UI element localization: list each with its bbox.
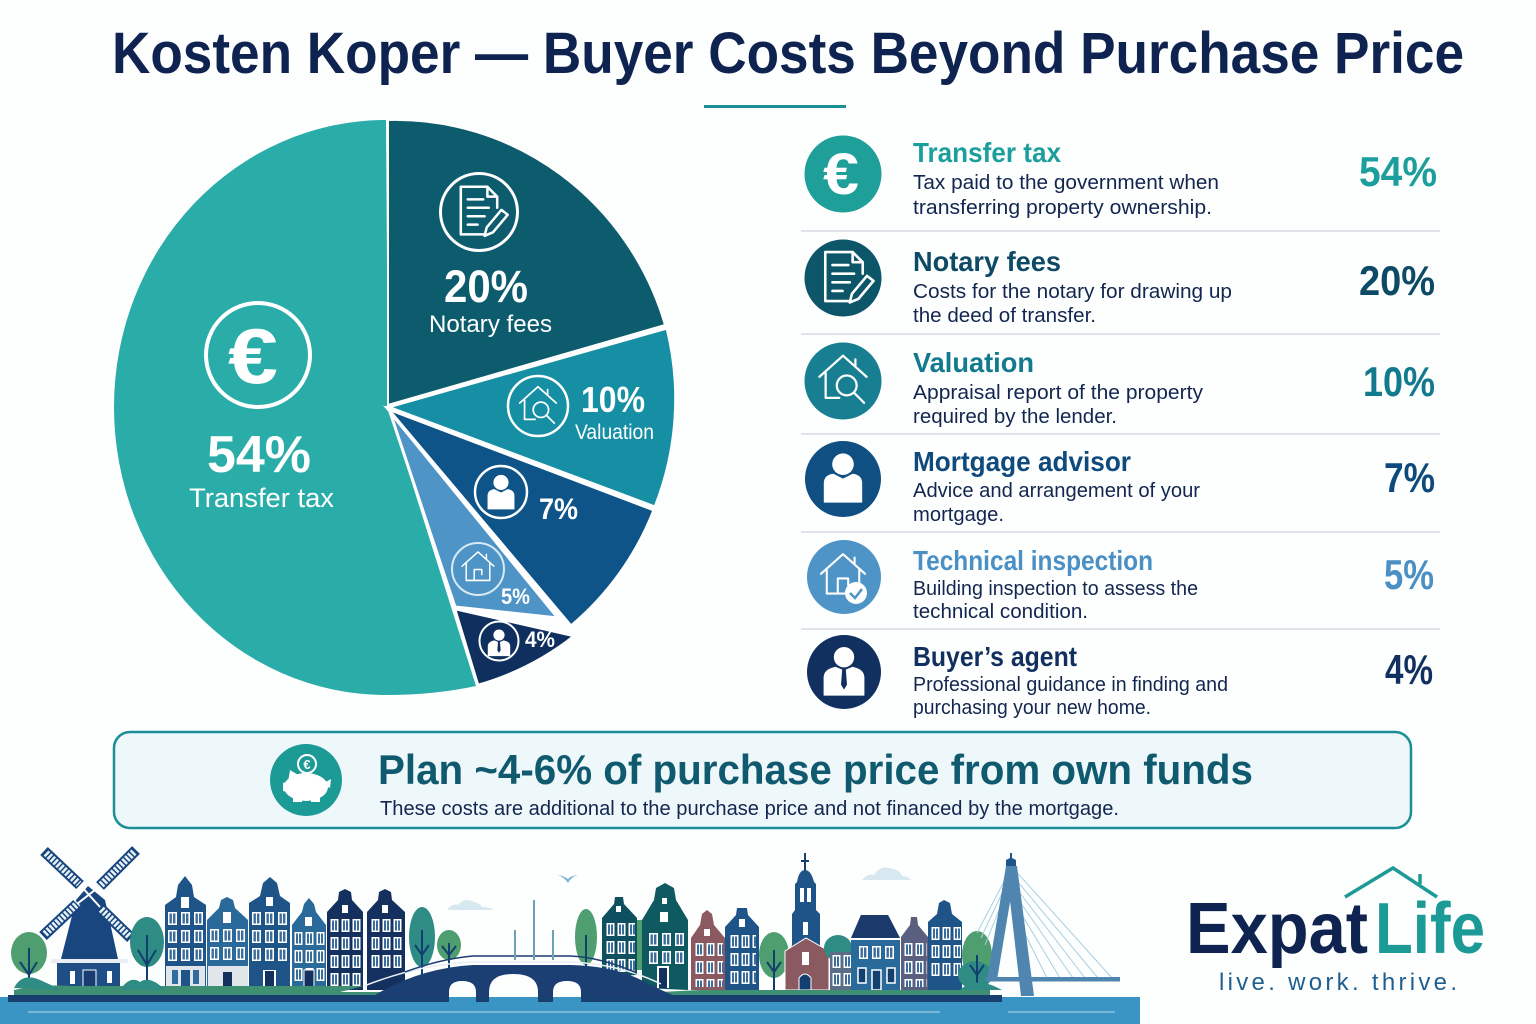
- callout: own funds: These costs are additional to the purchase price and not financed by the mortgage.: [380, 798, 1119, 820]
- ground: [14, 986, 990, 995]
- tree and houses right of bridge: [575, 883, 789, 990]
- row: valuation: required by the lender.: [913, 406, 1117, 428]
- row: mortgage advisor: mortgage.: [913, 504, 1004, 526]
- label: mortgage advisor: [475, 466, 578, 526]
- clouds and bird: [447, 867, 911, 910]
- pie chart: buyer costs: [114, 120, 676, 695]
- row: mortgage advisor: [805, 441, 1435, 526]
- row: valuation: Appraisal report of the property: [913, 382, 1203, 404]
- row: valuation: [804, 342, 1435, 428]
- row: valuation: 10%: [1363, 358, 1435, 405]
- slice: mortgage advisor 7%: [388, 409, 654, 626]
- label: transfer tax: [189, 303, 335, 513]
- logo: ExpatLife: [1186, 868, 1485, 996]
- slice: transfer tax 54%: [114, 120, 476, 695]
- row: buyer's agent: 4%: [1385, 646, 1433, 693]
- row: transfer tax: €: [823, 142, 859, 207]
- row: technical inspection: Technical inspection: [913, 545, 1153, 576]
- row: notary fees: the deed of transfer.: [913, 305, 1096, 327]
- row: transfer tax: Tax paid to the government when: [913, 172, 1219, 194]
- logo: ExpatLife: Expat: [1186, 889, 1368, 969]
- slice: notary fees 20%: [388, 120, 665, 405]
- row: mortgage advisor: Advice and arrangement of your: [913, 480, 1200, 502]
- row: technical inspection: technical condition.: [913, 601, 1088, 623]
- label: buyer's agent: 4%: [525, 627, 555, 652]
- row: transfer tax: Transfer tax: [913, 137, 1061, 168]
- row: technical inspection: Building inspection to assess the: [913, 578, 1198, 600]
- label: technical inspection: [452, 543, 530, 609]
- row: mortgage advisor: 7%: [1384, 454, 1435, 501]
- bridge: [364, 900, 675, 1002]
- callout: own funds: [114, 732, 1411, 828]
- cable-stayed bridge: [977, 853, 1120, 996]
- label: notary fees: [429, 174, 552, 338]
- row: buyer's agent: purchasing your new home.: [913, 697, 1151, 719]
- row: notary fees: Notary fees: [913, 246, 1061, 277]
- icon: piggy bank: €: [303, 757, 311, 772]
- logo: ExpatLife: live. work. thrive.: [1219, 969, 1457, 996]
- row: transfer tax: [804, 136, 1437, 219]
- row: mortgage advisor: Mortgage advisor: [913, 446, 1131, 477]
- church: [785, 853, 829, 990]
- slice: technical inspection 5%: [390, 412, 558, 618]
- label: transfer tax: €: [228, 312, 278, 400]
- row: transfer tax: 54%: [1359, 148, 1437, 195]
- label: valuation: [508, 376, 654, 444]
- row: buyer's agent: [807, 635, 1433, 719]
- illustration: Dutch skyline: [0, 850, 1140, 1024]
- icon: piggy bank: [270, 744, 342, 816]
- row: technical inspection: [807, 540, 1434, 623]
- canal houses left: [165, 876, 405, 990]
- slice: buyer's agent 4%: [455, 609, 574, 685]
- row: notary fees: [804, 240, 1435, 327]
- label: technical inspection: 5%: [501, 584, 530, 609]
- trees left: [11, 907, 461, 990]
- logo: ExpatLife: Life: [1375, 889, 1485, 969]
- row: buyer's agent: Buyer’s agent: [913, 641, 1077, 672]
- row: notary fees: Costs for the notary for drawing up: [913, 281, 1232, 303]
- row: technical inspection: 5%: [1384, 551, 1434, 598]
- row: transfer tax: transferring property ownership.: [913, 197, 1212, 219]
- label: valuation: Valuation: [575, 421, 654, 444]
- row: valuation: Valuation: [913, 347, 1034, 378]
- houses right: [824, 900, 992, 993]
- windmill: [43, 850, 136, 990]
- label: buyer's agent: [480, 622, 555, 660]
- label: valuation: 10%: [581, 379, 645, 420]
- label: notary fees: Notary fees: [429, 311, 552, 338]
- water: [0, 997, 1140, 1024]
- label: transfer tax: 54%: [207, 426, 311, 484]
- label: mortgage advisor: 7%: [539, 493, 578, 526]
- slice: valuation 10%: [388, 328, 676, 507]
- row: notary fees: 20%: [1359, 257, 1435, 304]
- row: buyer's agent: Professional guidance in finding and: [913, 674, 1228, 696]
- label: transfer tax: Transfer tax: [189, 483, 335, 513]
- legend list: [801, 136, 1440, 719]
- icon: roof: [1345, 868, 1437, 897]
- callout: own funds: Plan ~4-6% of purchase price from own funds: [378, 746, 1253, 793]
- label: notary fees: 20%: [444, 261, 528, 312]
